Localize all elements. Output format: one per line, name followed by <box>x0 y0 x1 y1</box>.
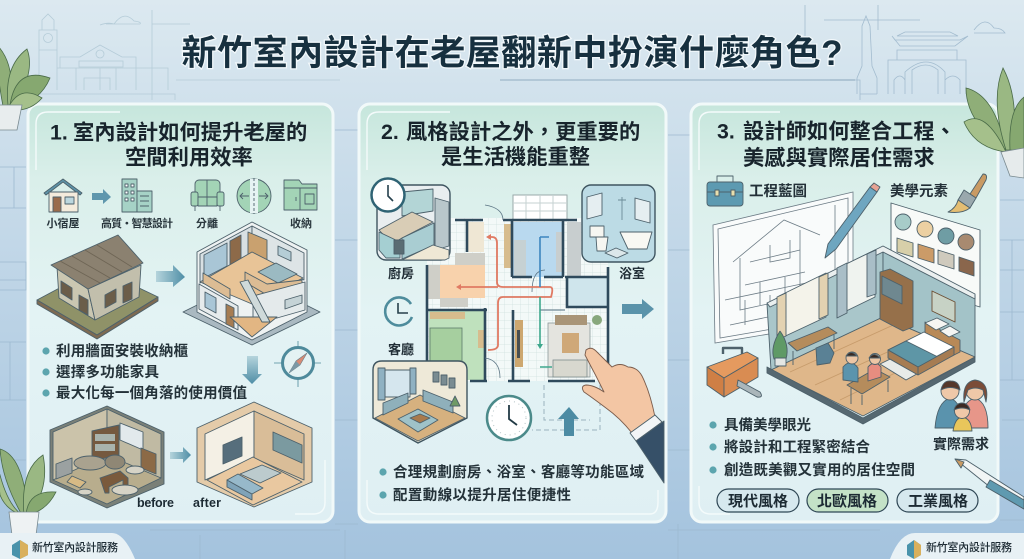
logo badge: bottom left <box>0 533 135 559</box>
panel 3 heading: 美感與實際居住需求 <box>743 145 935 170</box>
plant: top left <box>0 46 50 130</box>
label: blueprint: 工程藍圖 <box>749 183 807 200</box>
arrow: old house to new <box>156 265 185 287</box>
bullet list 3: 創造既美觀又實用的居住空間 <box>724 461 915 479</box>
style tag: modern <box>717 489 799 512</box>
icon: separation circle <box>237 178 271 214</box>
icon labels: 小宿屋 <box>46 216 80 230</box>
style tag: modern: 現代風格 <box>728 492 788 510</box>
logo badge: bottom right <box>890 533 1024 559</box>
icon labels <box>46 216 312 230</box>
illustration: before room <box>50 406 164 508</box>
illustration: renovated cutaway house <box>183 222 320 345</box>
plant: top right <box>964 68 1024 178</box>
panel 1: space efficiency <box>28 104 333 522</box>
icon: toolbox <box>707 348 761 397</box>
bullet list 1: 最大化每一個角落的使用價值 <box>56 384 248 402</box>
panel 2 card <box>359 104 666 522</box>
panel 2 heading: 風格設計之外，更重要的 <box>406 119 640 144</box>
living room illustration <box>373 361 467 443</box>
label: real needs: 實際需求 <box>933 436 989 452</box>
icon: storage cabinet <box>284 180 317 210</box>
icon: briefcase <box>707 176 743 206</box>
plant: bottom left <box>0 449 56 535</box>
icon: center clock <box>487 396 531 440</box>
bullet list 1 <box>42 342 248 402</box>
pencil <box>825 183 880 258</box>
blueprint sheet <box>713 192 853 343</box>
bullet list 1: 利用牆面安裝收納櫃 <box>56 342 188 360</box>
bathroom illustration <box>582 185 655 262</box>
panel 1 heading: 1. <box>50 120 68 144</box>
illustration: after room <box>197 402 312 507</box>
panel 2 heading: 是生活機能重整 <box>441 145 590 169</box>
arrow: up <box>558 407 579 436</box>
bullet list 2 <box>379 463 644 504</box>
icon: compass <box>274 341 321 387</box>
swatch sheet <box>891 203 980 307</box>
icon: small house <box>44 179 82 212</box>
arrow: before to after <box>170 447 191 463</box>
panel 3 card <box>691 104 998 522</box>
logo badge: bottom right: 新竹室內設計服務 <box>926 540 1012 554</box>
style tag: nordic: 北歐風格 <box>817 492 877 510</box>
logo badge: bottom left: 新竹室內設計服務 <box>32 540 118 554</box>
brush: lower right <box>955 459 1024 509</box>
bullet list 2: 配置動線以提升居住便捷性 <box>393 486 571 504</box>
bullet list 3: 將設計和工程緊密結合 <box>724 438 870 456</box>
arrow: right <box>622 299 654 319</box>
icon: family <box>935 380 988 431</box>
style tag: industrial: 工業風格 <box>908 492 968 510</box>
label: aesthetic elements: 美學元素 <box>890 182 948 200</box>
icon: kitchen clock <box>372 178 404 212</box>
before after labels <box>137 496 221 510</box>
floor plan <box>426 195 608 430</box>
landmark: memorial tower and gate <box>500 5 1005 100</box>
style tag: industrial <box>897 489 978 512</box>
icon: sofa <box>191 180 224 211</box>
panel 3 heading: 設計師如何整合工程、 <box>743 120 956 144</box>
label: kitchen: 廚房 <box>388 266 414 281</box>
illustration: old house <box>37 235 158 339</box>
bullet list 1: 選擇多功能家具 <box>56 363 160 381</box>
blueprint background lines <box>0 130 1024 559</box>
before after labels: before <box>137 496 174 510</box>
arrow <box>92 189 111 204</box>
panel 1 heading: 室內設計如何提升老屋的 <box>73 120 307 144</box>
icon labels: 高質・智慧設計 <box>101 216 173 230</box>
kitchen illustration <box>377 185 450 260</box>
arrow: down <box>242 356 262 384</box>
panel 3 heading: 3. <box>717 120 735 144</box>
panel 1 heading: 空間利用效率 <box>125 146 253 170</box>
label: bathroom: 浴室 <box>619 266 645 281</box>
illustration: isometric room <box>767 246 975 424</box>
bullet list 2: 合理規劃廚房、浴室、客廳等功能區域 <box>393 463 644 481</box>
label: living room: 客廳 <box>388 342 414 357</box>
before after labels: after <box>193 496 221 510</box>
icon labels: 收納 <box>290 216 312 230</box>
panel 3 heading <box>717 120 956 170</box>
bullet list 3: 具備美學眼光 <box>724 416 812 434</box>
panel 2 heading: 2. <box>381 120 399 144</box>
panel 3: integration <box>691 104 998 522</box>
style tag: nordic <box>807 489 888 512</box>
icon: building <box>122 179 152 212</box>
bullet list 3 <box>709 416 915 479</box>
landmark: clock tower and old station <box>38 10 340 100</box>
panel 1 card <box>28 104 333 522</box>
title: 新竹室內設計在老屋翻新中扮演什麼角色? <box>182 34 842 73</box>
panel 1 heading <box>50 120 307 170</box>
icon: pointing hand <box>582 348 664 483</box>
panel 2: function reorganization <box>359 104 666 522</box>
icon labels: 分離 <box>196 216 218 230</box>
panel 2 heading <box>381 119 640 169</box>
icon: time loop <box>385 297 412 325</box>
icon: paint brush <box>948 174 987 212</box>
